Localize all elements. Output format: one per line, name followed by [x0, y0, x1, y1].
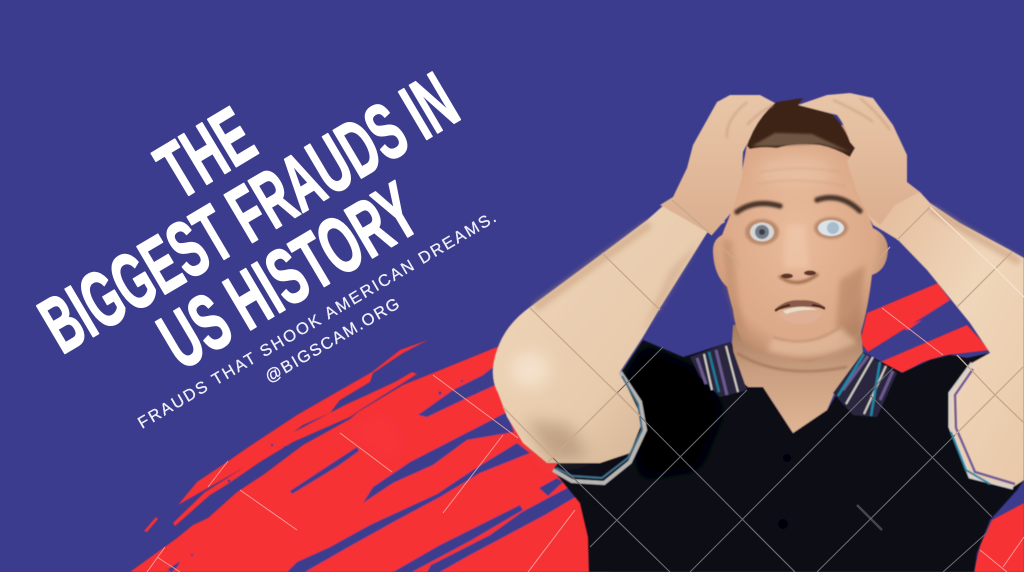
long thin streak: [287, 443, 530, 572]
right brow: [817, 198, 860, 211]
right finger lines: [833, 98, 890, 130]
shoulder shadow: [625, 345, 725, 480]
title line 3: US HISTORY: [144, 165, 432, 386]
wide streak: [363, 412, 514, 503]
nose bridge highlight: [784, 225, 810, 268]
forearm top edge shading: [930, 208, 1020, 262]
nostrils: [781, 274, 793, 278]
right hand: [798, 93, 920, 225]
lower streak A: [393, 505, 523, 572]
man in panic: [493, 93, 1024, 572]
hem purple stripe: [955, 369, 1015, 484]
thin centre streak: [290, 447, 359, 494]
neck: [732, 320, 863, 433]
forehead highlight: [757, 157, 833, 187]
brush: right upper strip: [860, 283, 950, 352]
eye socket: [745, 219, 779, 245]
iris: [827, 222, 839, 234]
collar purple stripes: [843, 356, 893, 400]
eye socket: [814, 217, 848, 239]
nose base: [779, 274, 818, 283]
brush: blue slash: [870, 300, 967, 362]
faint lines over red: [147, 308, 1024, 572]
forearm underside shadow: [640, 240, 700, 335]
subtitle line 1: FRAUDS THAT SHOOK AMERICAN DREAMS.: [135, 208, 499, 432]
lattice lines on skin: [503, 200, 1024, 462]
brush: small fleck: [144, 517, 158, 532]
eye white: [750, 222, 774, 242]
shirt: [553, 340, 1024, 572]
brush: second strand: [173, 372, 417, 526]
collar pale stripes: [704, 346, 738, 392]
lattice lines on shirt: [553, 347, 992, 572]
forearm and elbow: [493, 190, 725, 463]
hem teal stripe: [556, 376, 642, 478]
teeth: [783, 307, 818, 314]
title: [25, 56, 472, 386]
left eye: [745, 219, 779, 245]
cheek shading: [836, 265, 865, 350]
left finger lines: [727, 102, 773, 138]
website handle: @BIGSCAM.ORG: [262, 295, 403, 386]
small specks: [438, 391, 442, 395]
nose: [779, 225, 818, 283]
left brow: [737, 204, 780, 212]
right eye: [814, 217, 848, 239]
shirt buttons: [778, 454, 791, 529]
hem teal stripe: [951, 432, 990, 484]
hair highlight: [752, 133, 850, 152]
face: [713, 125, 888, 362]
pupil: [759, 229, 765, 235]
wedge near sleeve: [539, 478, 563, 496]
right arm: [798, 93, 1024, 487]
lower lip: [779, 312, 823, 324]
brush: blue streaks over red: [167, 367, 579, 572]
upper lip: [775, 301, 825, 310]
mouth: [775, 301, 825, 324]
lower streak B: [427, 485, 579, 572]
collar pale stripes: [846, 357, 886, 414]
right collar: [833, 352, 897, 417]
elbow shadow: [525, 420, 590, 462]
forehead wrinkles: [757, 168, 845, 186]
brush: small red mark in slash: [900, 320, 922, 330]
hair: [747, 98, 855, 157]
upper inlet: [418, 367, 500, 417]
mouth opening: [775, 305, 825, 311]
collar teal stripe: [709, 352, 719, 392]
neck crease: [737, 353, 847, 371]
title line 1: THE: [142, 90, 269, 216]
left sleeve hem: [553, 372, 645, 483]
collar base: [690, 342, 747, 397]
shirt dark shoulder: [625, 345, 725, 480]
left arm: [493, 95, 775, 463]
collar base: [833, 352, 897, 417]
chin fold: [767, 327, 857, 357]
brush: main sweep: [130, 335, 610, 572]
elbow highlight: [510, 352, 550, 388]
brush: bottom right corner: [974, 503, 1024, 572]
forearm top edge shading: [535, 224, 650, 308]
brush: highlight smudge: [340, 405, 410, 470]
iris: [755, 225, 769, 239]
collar purple stripes: [697, 350, 727, 395]
right sleeve hem: [950, 363, 1015, 488]
subtitle: [135, 208, 499, 432]
forearm: [867, 190, 1024, 487]
left hand: [660, 95, 775, 235]
collar teal stripe: [838, 354, 880, 416]
brush: top streak: [178, 340, 428, 505]
red brush strokes: [130, 283, 1024, 572]
chin crease line: [773, 327, 840, 341]
brush: right lower strip: [878, 325, 990, 373]
left collar: [690, 342, 747, 397]
hem white stripe: [553, 372, 645, 483]
left side shading: [722, 240, 745, 335]
eye white: [818, 220, 844, 236]
hem white stripe: [950, 363, 1013, 488]
